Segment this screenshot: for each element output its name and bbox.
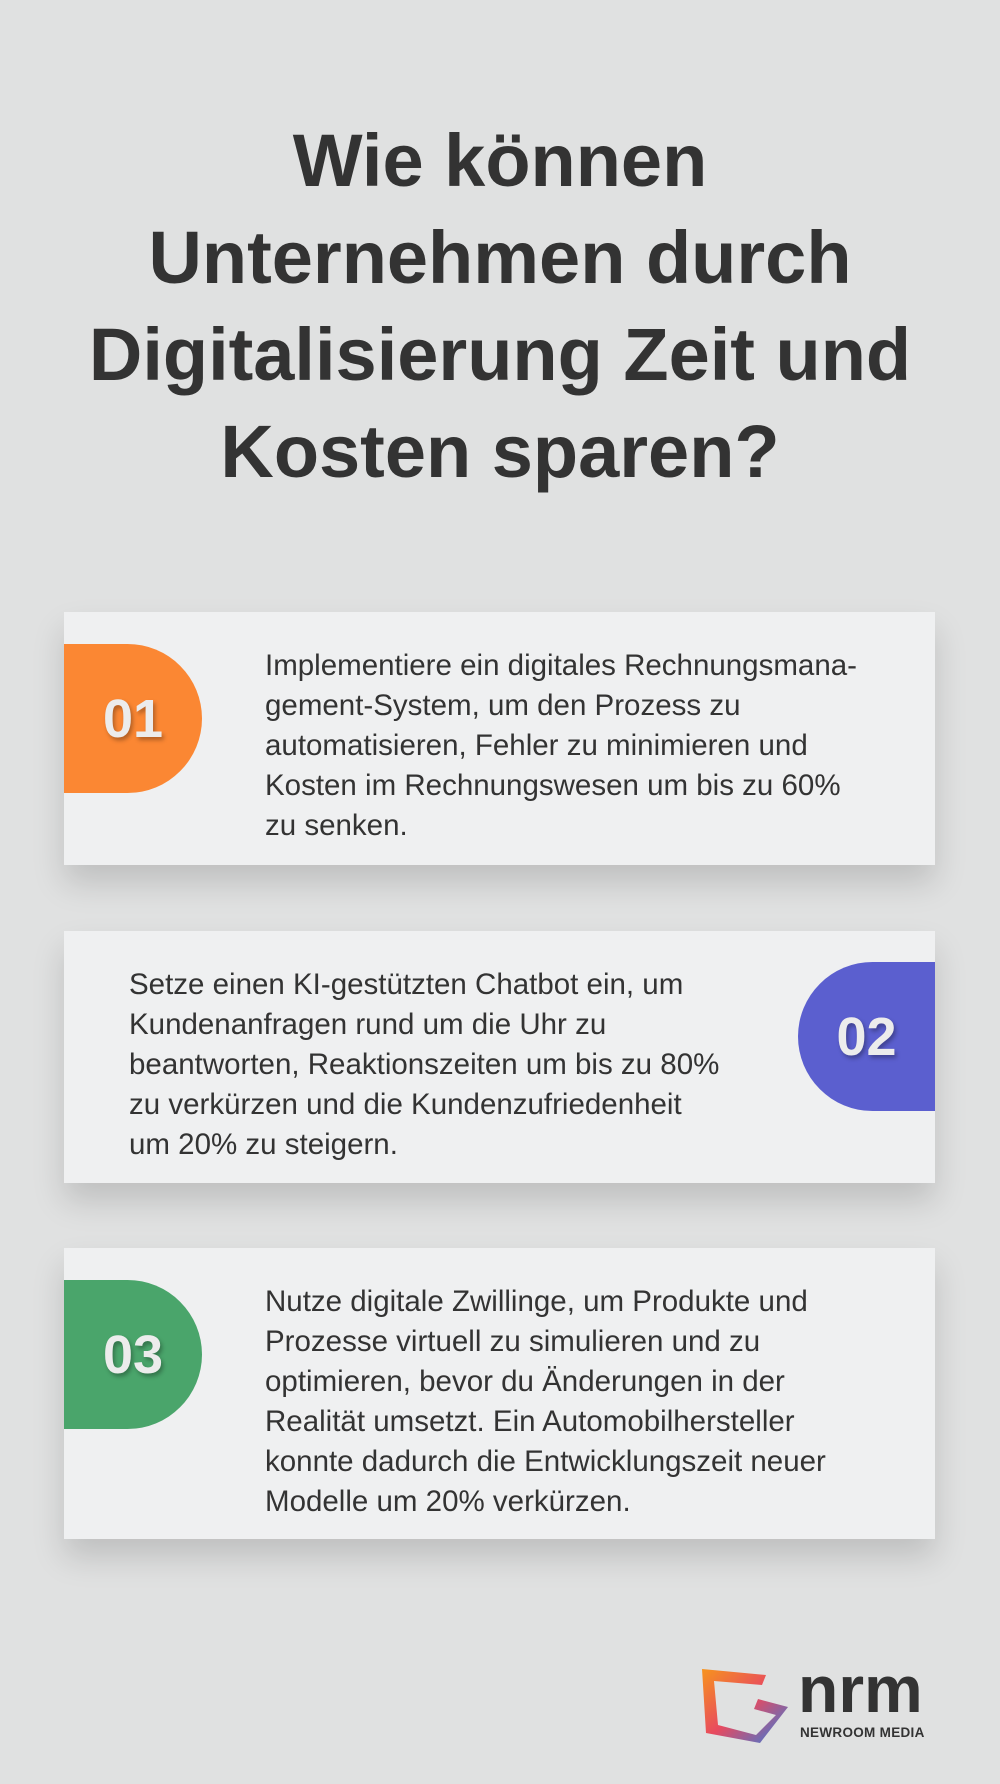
- text step 3: Nutze digitale Zwillinge, um Produkte und: [265, 1285, 808, 1318]
- text step 2: Setze einen KI-gestützten Chatbot ein, um: [129, 968, 683, 1001]
- title: Kosten sparen?: [220, 410, 780, 493]
- text step 3: Prozesse virtuell zu simulieren und zu: [265, 1325, 760, 1358]
- text step 1: gement-System, um den Prozess zu: [265, 689, 740, 722]
- badge 03: 03: [103, 1324, 163, 1384]
- panel: step 1: [64, 612, 935, 865]
- text step 1: automatisieren, Fehler zu minimieren und: [265, 729, 808, 762]
- title: Wie können: [293, 119, 707, 202]
- text step 3: Modelle um 20% verkürzen.: [265, 1485, 631, 1518]
- badge 02: 02: [836, 1006, 897, 1066]
- text step 2: zu verkürzen und die Kundenzufriedenheit: [129, 1088, 682, 1121]
- text step 1: Kosten im Rechnungswesen um bis zu 60%: [265, 769, 841, 802]
- text step 2: Kundenanfragen rund um die Uhr zu: [129, 1008, 606, 1041]
- text step 1: [265, 649, 857, 842]
- logo text: nrm: [798, 1652, 923, 1726]
- badge 01: [64, 644, 202, 793]
- badge 01: 01: [103, 688, 163, 748]
- text step 3: [265, 1285, 826, 1518]
- text step 3: Realität umsetzt. Ein Automobilhersteller: [265, 1405, 795, 1438]
- text step 3: optimieren, bevor du Änderungen in der: [265, 1365, 785, 1398]
- icon: logo mark: [702, 1669, 788, 1743]
- title: [89, 119, 911, 493]
- text step 2: [129, 968, 719, 1161]
- text step 2: um 20% zu steigern.: [129, 1128, 398, 1161]
- title: Digitalisierung Zeit und: [89, 313, 911, 396]
- logo: NEWROOM MEDIA: [800, 1725, 925, 1740]
- badge 02: [798, 962, 935, 1111]
- logo: [702, 1652, 925, 1743]
- text step 1: zu senken.: [265, 809, 408, 842]
- text step 3: konnte dadurch die Entwicklungszeit neuer: [265, 1445, 826, 1478]
- panel: step 3: [64, 1248, 935, 1539]
- text step 2: beantworten, Reaktionszeiten um bis zu 80%: [129, 1048, 719, 1081]
- text step 1: Implementiere ein digitales Rechnungsmana-: [265, 649, 857, 682]
- panel: step 2: [64, 931, 935, 1183]
- title: Unternehmen durch: [148, 216, 852, 299]
- badge 03: [64, 1280, 202, 1429]
